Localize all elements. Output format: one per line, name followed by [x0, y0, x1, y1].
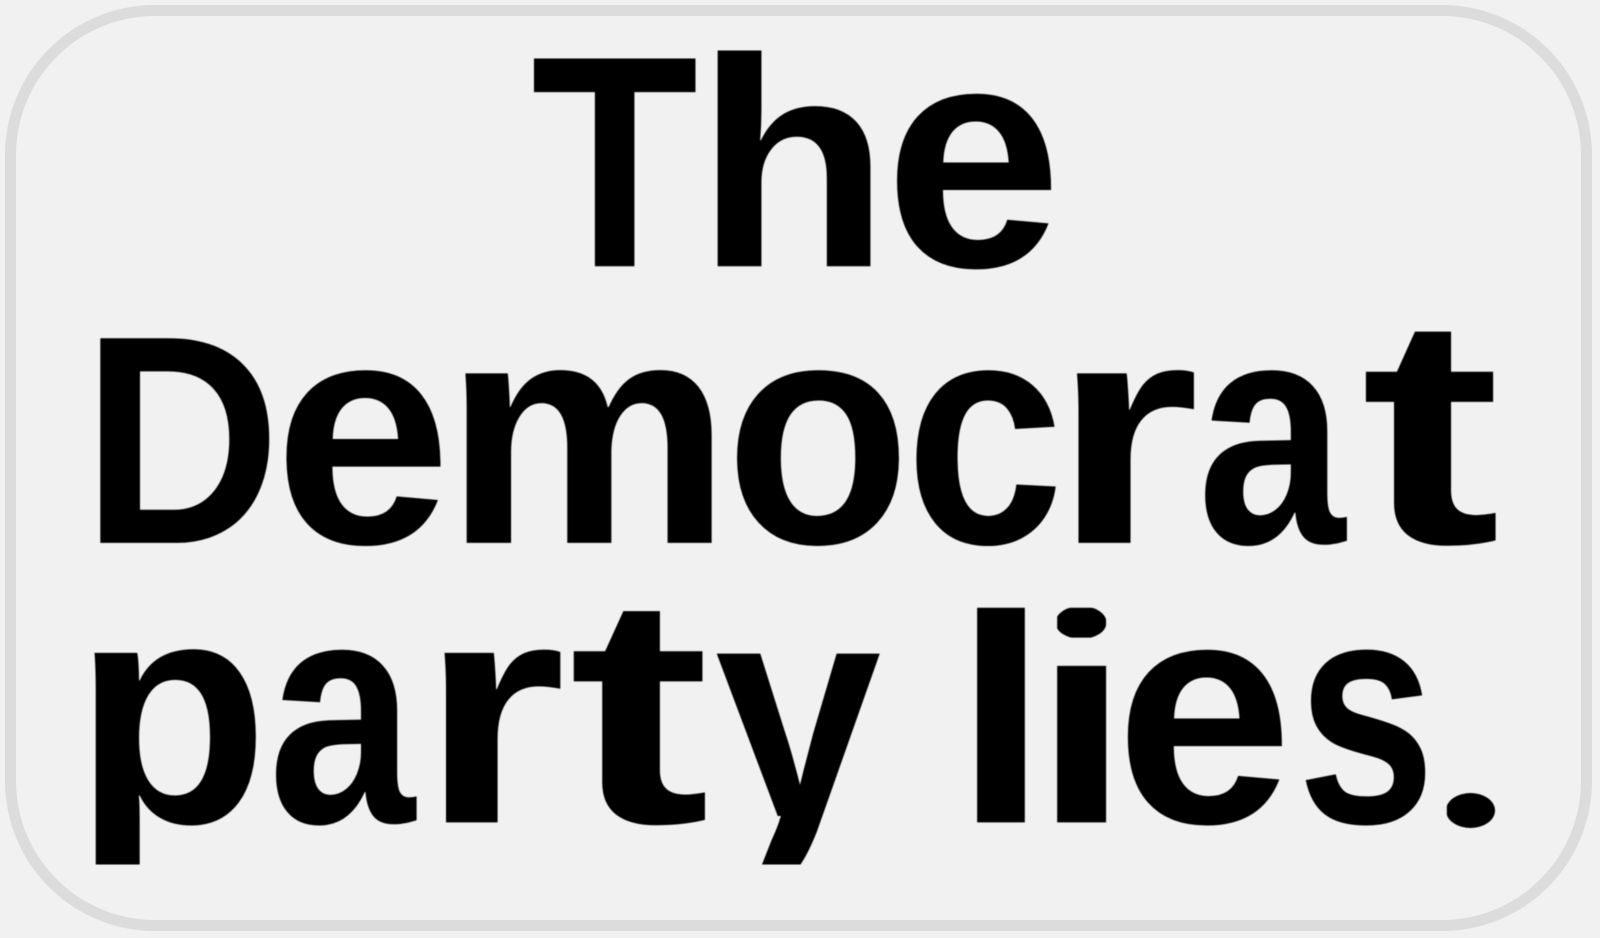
title line 1	[531, 0, 1062, 334]
title line 2: c	[905, 253, 1064, 612]
title line 3: p	[73, 532, 269, 893]
title line 1: h	[695, 0, 890, 330]
title line 3: y	[714, 533, 883, 892]
title line 3: l	[953, 555, 1049, 886]
title line 3: s	[1297, 532, 1435, 891]
title	[94, 50, 1496, 866]
title line 2: r	[1052, 253, 1200, 611]
title line 2: o	[725, 253, 911, 612]
title line 2: m	[444, 253, 732, 612]
title line 2: D	[82, 274, 281, 606]
title line 3: a	[268, 533, 417, 891]
title line 3: i	[1032, 555, 1131, 886]
title line 2: e	[274, 252, 451, 611]
title line 1: T	[531, 0, 698, 331]
title line 3: .	[1423, 600, 1519, 883]
title line 2	[82, 250, 1501, 612]
title line 3: r	[420, 533, 566, 891]
title line 2: t	[1361, 250, 1501, 612]
title line 3	[94, 606, 1496, 866]
title line 3: e	[1115, 532, 1293, 891]
title line 3: t	[569, 530, 710, 892]
title line 2: a	[1197, 253, 1347, 612]
